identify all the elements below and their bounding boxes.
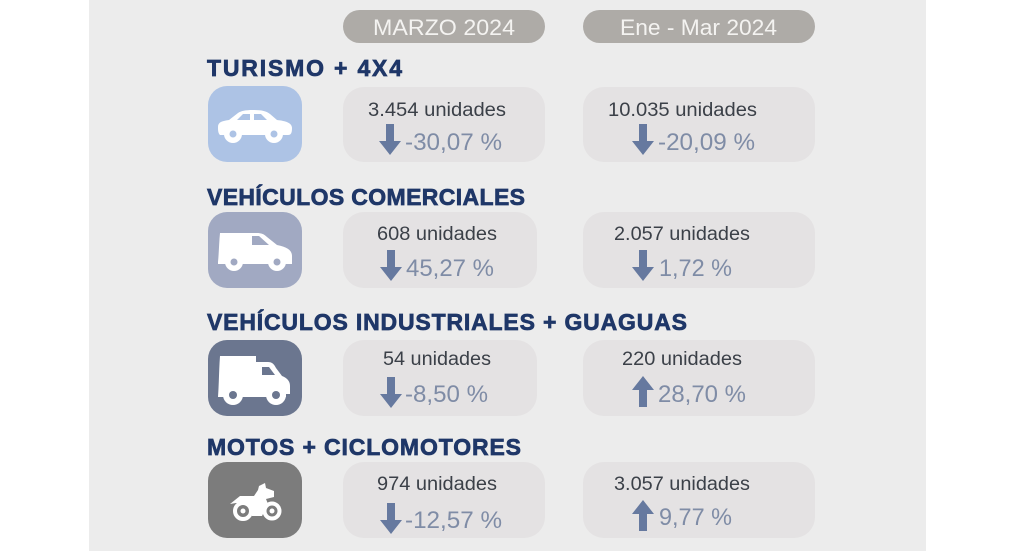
heading: Vehículos industriales + guaguas: VEHÍCULOS INDUSTRIALES + GUAGUAS <box>207 308 687 335</box>
stat card: turismo marzo: -30,07 % <box>405 129 502 156</box>
stat card: comerciales ene-mar <box>583 212 815 288</box>
stat card: turismo ene-mar <box>583 87 815 162</box>
stat card: turismo marzo <box>343 87 545 162</box>
heading: Vehículos comerciales: VEHÍCULOS COMERCIALES <box>207 183 525 210</box>
icon: motorcycle <box>208 462 302 538</box>
stat card: comerciales marzo: 608 unidades <box>377 224 497 245</box>
heading: Turismo + 4x4: TURISMO + 4X4 <box>207 55 402 81</box>
column header: MARZO 2024: MARZO 2024 <box>373 15 515 40</box>
stat card: motos marzo <box>343 462 545 538</box>
stat card: motos ene-mar <box>583 462 815 538</box>
column header: MARZO 2024 <box>343 10 545 43</box>
stat card: comerciales marzo <box>343 212 537 288</box>
stat card: motos ene-mar: 3.057 unidades <box>614 474 750 495</box>
column header: Ene - Mar 2024: Ene - Mar 2024 <box>620 15 777 40</box>
stat card: industriales ene-mar <box>583 340 815 416</box>
stat card: turismo marzo: 3.454 unidades <box>368 100 506 121</box>
stat card: motos ene-mar: 9,77 % <box>659 504 732 531</box>
stat card: turismo ene-mar: 10.035 unidades <box>608 100 757 121</box>
stat card: industriales marzo: 54 unidades <box>383 349 491 370</box>
heading: Motos + ciclomotores: MOTOS + CICLOMOTORES <box>207 434 521 460</box>
icon: car <box>208 86 302 162</box>
stat card: industriales marzo: -8,50 % <box>405 381 488 408</box>
stat card: comerciales ene-mar: 1,72 % <box>659 255 732 282</box>
stat card: industriales marzo <box>343 340 537 416</box>
stat card: motos marzo: 974 unidades <box>377 474 497 495</box>
stat card: industriales ene-mar: 28,70 % <box>658 381 746 408</box>
stat card: comerciales marzo: 45,27 % <box>406 255 494 282</box>
stat card: turismo ene-mar: -20,09 % <box>658 129 755 156</box>
stat card: industriales ene-mar: 220 unidades <box>622 349 742 370</box>
column header: Ene - Mar 2024 <box>583 10 815 43</box>
icon: van <box>208 212 302 288</box>
stat card: motos marzo: -12,57 % <box>405 507 502 534</box>
icon: truck <box>208 340 302 416</box>
stat card: comerciales ene-mar: 2.057 unidades <box>614 224 750 245</box>
